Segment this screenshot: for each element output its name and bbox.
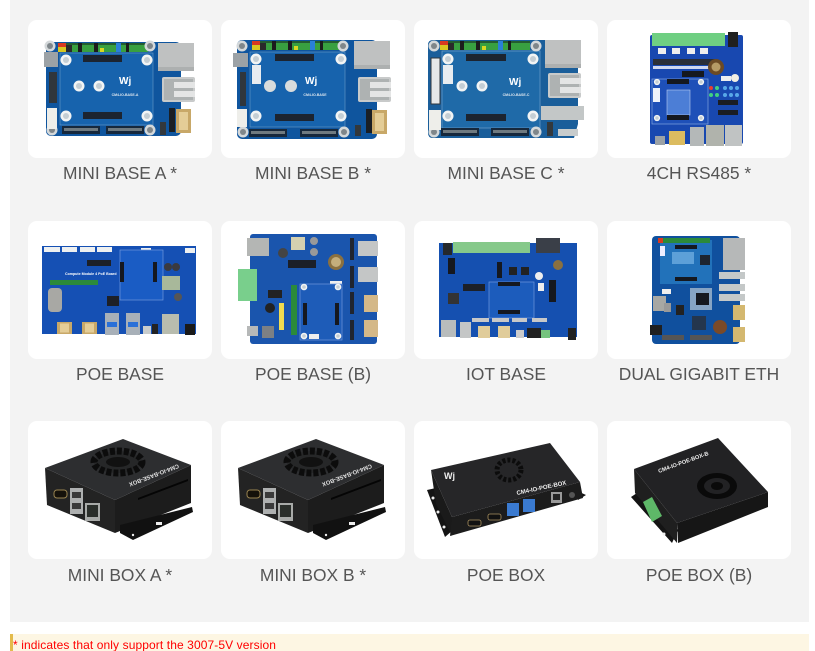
card: POE BASE (B) xyxy=(221,221,405,384)
label: POE BOX (B) xyxy=(646,565,752,585)
image: MINI BOX A enclosure: CM4-IO-BASE-BOX xyxy=(128,462,179,487)
label: DUAL GIGABIT ETH xyxy=(619,364,779,384)
image: POE BOX enclosure: CM4-IO-POE-BOX xyxy=(516,481,567,497)
label: 4CH RS485 * xyxy=(647,163,751,183)
image: MINI BASE C board: CM4-IO-BASE-C xyxy=(503,93,530,97)
image: POE BOX enclosure: Wj xyxy=(444,471,455,481)
image: POE BOX enclosure xyxy=(427,443,586,537)
image: MINI BASE B board: Wj xyxy=(305,76,317,87)
card: MINI BASE A xyxy=(28,20,212,183)
image: POE BASE (B) board xyxy=(238,234,378,344)
card: MINI BASE B xyxy=(221,20,405,183)
image: MINI BASE A board xyxy=(44,40,195,136)
card: 4CH RS485 xyxy=(607,20,791,183)
image: DUAL GIGABIT ETH board xyxy=(650,236,745,344)
label: MINI BASE B * xyxy=(255,163,371,183)
label: MINI BOX A * xyxy=(68,565,172,585)
image: 4CH RS485 board xyxy=(650,32,743,146)
note: version footnote xyxy=(10,634,809,651)
label: MINI BOX B * xyxy=(260,565,366,585)
image: MINI BASE B board: CM4-IO-BASE xyxy=(303,93,327,97)
image: MINI BASE A board: CM4-IO-BASE-A xyxy=(112,93,139,97)
label: POE BOX xyxy=(467,565,545,585)
card: POE BASE xyxy=(28,221,212,384)
label: IOT BASE xyxy=(466,364,546,384)
card: MINI BOX B xyxy=(221,421,405,585)
card: MINI BOX A xyxy=(28,421,212,585)
image: MINI BASE A board: Wj xyxy=(119,76,131,87)
image: MINI BOX B enclosure xyxy=(238,439,386,540)
image: MINI BASE B board xyxy=(233,40,391,139)
label: MINI BASE A * xyxy=(63,163,177,183)
card: POE BOX (B) xyxy=(607,421,791,585)
label: POE BASE (B) xyxy=(255,364,371,384)
image: POE BASE board: Compute Module 4 PoE Board xyxy=(65,272,117,276)
image: POE BOX (B) enclosure xyxy=(631,438,768,543)
card: DUAL GIGABIT ETH xyxy=(607,221,791,384)
label: POE BASE xyxy=(76,364,164,384)
card: MINI BASE C xyxy=(414,20,598,183)
image: MINI BASE C board: Wj xyxy=(509,77,521,88)
image: IOT BASE board xyxy=(439,238,577,340)
card: IOT BASE xyxy=(414,221,598,384)
image: MINI BOX A enclosure xyxy=(45,439,193,540)
image: MINI BOX B enclosure: CM4-IO-BASE-BOX xyxy=(321,462,372,487)
image: POE BASE board xyxy=(42,246,196,335)
image: POE BOX (B) enclosure: CM4-IO-POE-BOX-B xyxy=(658,451,710,475)
card: POE BOX xyxy=(414,421,598,585)
image: MINI BASE C board xyxy=(428,40,584,138)
label: MINI BASE C * xyxy=(448,163,564,183)
